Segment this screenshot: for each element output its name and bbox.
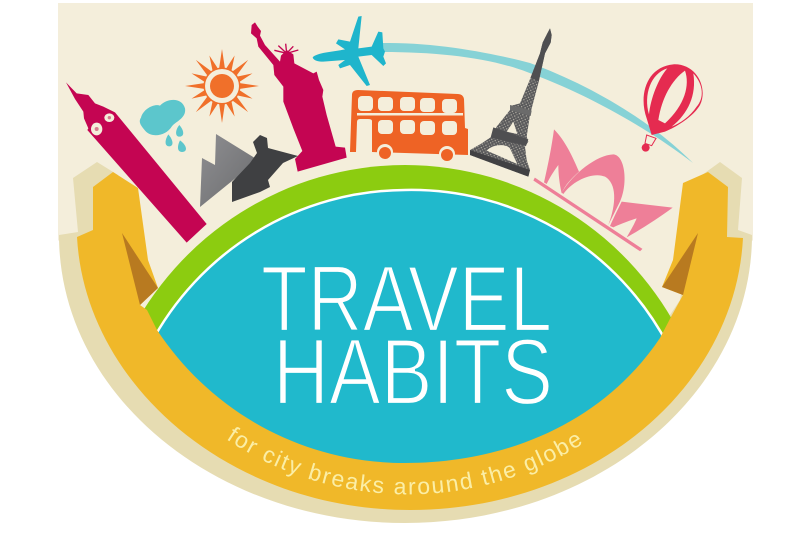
icon: statue of liberty bbox=[251, 22, 347, 172]
icon: sun bbox=[185, 49, 259, 123]
globe green rim bbox=[127, 165, 683, 470]
icon: pyramids bbox=[200, 134, 258, 207]
icon: rain cloud bbox=[140, 100, 186, 152]
icon: sphinx bbox=[232, 135, 298, 202]
title: TRAVEL bbox=[261, 246, 552, 351]
ribbon fold right bbox=[662, 233, 698, 295]
ribbon shadow bbox=[59, 162, 752, 523]
cream background panel bbox=[58, 3, 753, 330]
ribbon fold left bbox=[122, 233, 158, 305]
icon: eiffel tower bbox=[470, 28, 552, 177]
icon: big ben bbox=[66, 82, 207, 243]
icon: double decker bus bbox=[350, 90, 468, 162]
subtitle on curve: for city breaks around the globe bbox=[228, 427, 582, 494]
globe teal dome bbox=[150, 190, 668, 478]
title: HABITS bbox=[273, 319, 553, 424]
title bbox=[261, 246, 553, 424]
icon: hot air balloon bbox=[642, 64, 703, 152]
icon: airplane bbox=[313, 16, 386, 86]
icon: sydney opera house bbox=[534, 129, 673, 251]
icon: contrail bbox=[383, 43, 693, 163]
yellow ribbon banner bbox=[77, 172, 743, 510]
